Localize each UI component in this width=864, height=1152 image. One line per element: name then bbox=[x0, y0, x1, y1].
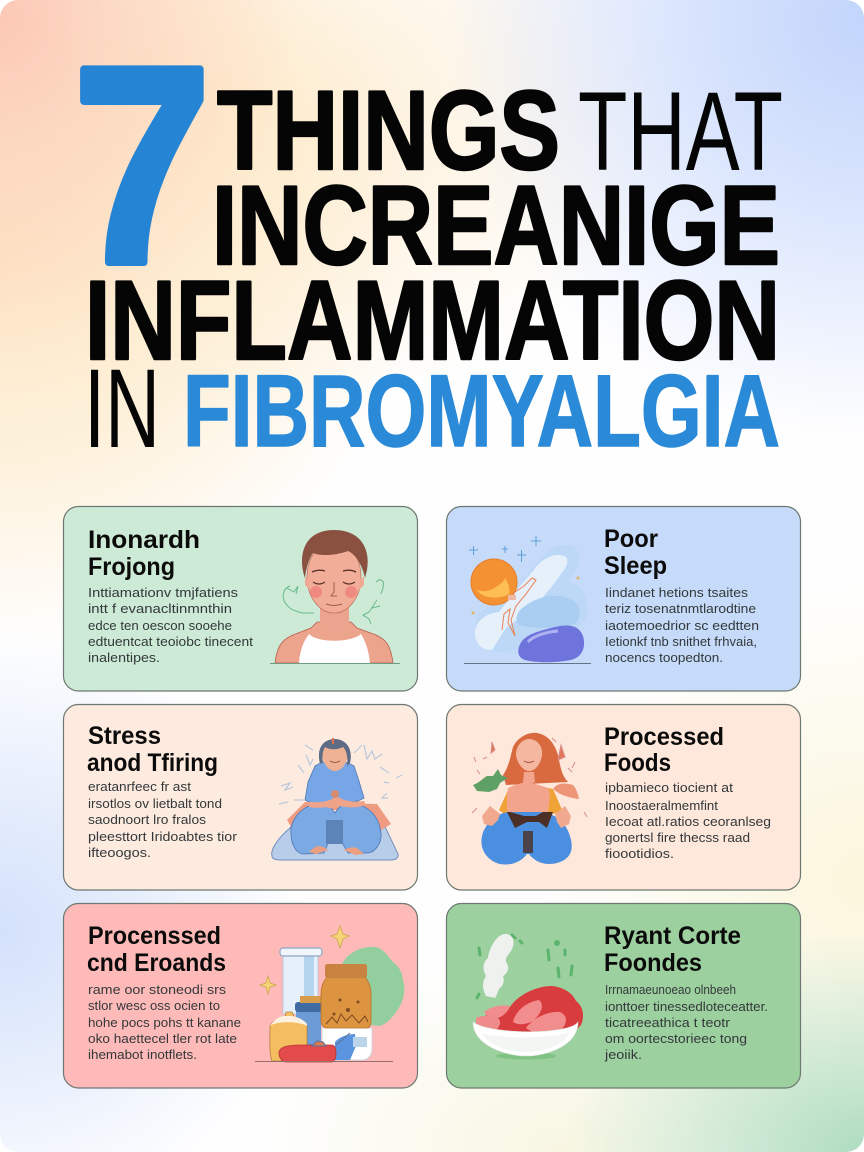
card 3 text: irsotlos ov lietbalt tond bbox=[88, 796, 222, 811]
big number seven: 7 bbox=[73, 10, 211, 322]
card 2 text bbox=[605, 585, 759, 665]
card 3 text: ifteoogos. bbox=[88, 845, 151, 860]
panel: card 5 bbox=[64, 904, 418, 1088]
card 5 text: oko haettecel tler rot late bbox=[88, 1031, 237, 1046]
panel: card 6 bbox=[446, 904, 800, 1088]
card 2 heading bbox=[604, 525, 667, 580]
card 6 text: jeoiik. bbox=[604, 1047, 642, 1062]
card 5 text: rame oor stoneodi srs bbox=[88, 982, 227, 997]
card 2 text: nocencs toopedton. bbox=[605, 650, 723, 665]
card 1 text: edtuentcat teoiobc tinecent bbox=[88, 634, 253, 649]
title bbox=[73, 10, 783, 471]
card 4 text: ipbamieco tiocient at bbox=[605, 780, 733, 795]
card 6 text: Irrnamaeunoeao olnbeeh bbox=[605, 982, 736, 997]
card 3 text: pleesttort Iridoabtes tior bbox=[88, 829, 238, 844]
icon: kneeling stressed person bbox=[272, 738, 402, 860]
card 6 heading: Foondes bbox=[604, 949, 702, 977]
panel: card 3 bbox=[64, 704, 418, 890]
card 1 heading bbox=[88, 526, 200, 581]
icon: bowl of red meat with steam bbox=[473, 934, 583, 1060]
card 3 text: eratanrfeec fr ast bbox=[88, 779, 191, 794]
icon: sun, pillows and sleep bbox=[464, 536, 591, 664]
card 3 heading bbox=[87, 722, 218, 777]
card 1 text bbox=[88, 585, 253, 665]
card 3 heading: Stress bbox=[88, 722, 161, 750]
card 5 text: ihemabot inotflets. bbox=[88, 1047, 197, 1062]
card 1 text: edce ten oescon sooehe bbox=[88, 618, 232, 633]
title line 4: IN bbox=[84, 346, 160, 471]
card 5 heading: cnd Eroands bbox=[87, 949, 226, 977]
card 4 text: Iecoat atl.ratios ceoranlseg bbox=[605, 814, 771, 829]
card 1 text: intt f evanacltinmnthin bbox=[88, 601, 232, 616]
card 4 heading bbox=[604, 723, 724, 777]
card 4 text: fioootidios. bbox=[605, 846, 674, 861]
panel: card 4 bbox=[446, 704, 800, 890]
icon: jars and processed food bbox=[255, 926, 404, 1062]
card 4 text: gonertsl fire thecss raad bbox=[605, 830, 750, 845]
card 2 text: teriz tosenatnmtlarodtine bbox=[605, 601, 756, 616]
icon: red-haired woman with vegetables bbox=[472, 733, 587, 865]
card 1 text: inalentipes. bbox=[88, 650, 160, 665]
card 3 heading: anod Tfiring bbox=[87, 749, 218, 777]
card 2 text: Iindanet hetions tsaites bbox=[605, 585, 749, 600]
card 5 heading: Procenssed bbox=[88, 922, 221, 950]
card 1 heading: Inonardh bbox=[88, 526, 200, 554]
card 2 heading: Poor bbox=[604, 525, 658, 553]
title line 1: THINGS bbox=[217, 68, 560, 193]
card 6 text bbox=[604, 982, 768, 1062]
card 5 text: stlor wesc oss ocien to bbox=[88, 998, 220, 1013]
card 2 text: Ietionkf tnb snithet frhvaia, bbox=[605, 634, 757, 649]
card 5 heading bbox=[87, 922, 226, 977]
card 4 heading: Processed bbox=[604, 723, 724, 751]
card 1 heading: Frojong bbox=[88, 553, 175, 581]
card 4 heading: Foods bbox=[604, 749, 671, 777]
card 6 heading: Ryant Corte bbox=[604, 922, 741, 950]
card 6 text: ionttoer tinessedloteceatter. bbox=[605, 999, 768, 1014]
card 6 heading bbox=[604, 922, 741, 977]
title line 1: THAT bbox=[578, 69, 783, 194]
card 6 text: ticatreeathica t teotr bbox=[605, 1015, 731, 1030]
card 6 text: om oortecstorieec tong bbox=[605, 1031, 747, 1046]
card 1 text: Inttiamationv tmjfatiens bbox=[88, 585, 239, 600]
card 3 text bbox=[88, 779, 238, 860]
card 5 text bbox=[88, 982, 241, 1062]
card 2 heading: Sleep bbox=[604, 552, 667, 580]
icon: woman with flushed face bbox=[270, 530, 400, 664]
card 3 text: saodnoort lro fralos bbox=[88, 812, 207, 827]
card 4 text: Inoostaeralmemfint bbox=[605, 798, 718, 813]
card 4 text bbox=[605, 780, 771, 861]
panel: card 1 bbox=[64, 506, 418, 691]
panel: card 2 bbox=[446, 506, 800, 691]
card 5 text: hohe pocs pohs tt kanane bbox=[88, 1015, 241, 1030]
card 2 text: iaotemoedrior sc eedtten bbox=[605, 618, 759, 633]
